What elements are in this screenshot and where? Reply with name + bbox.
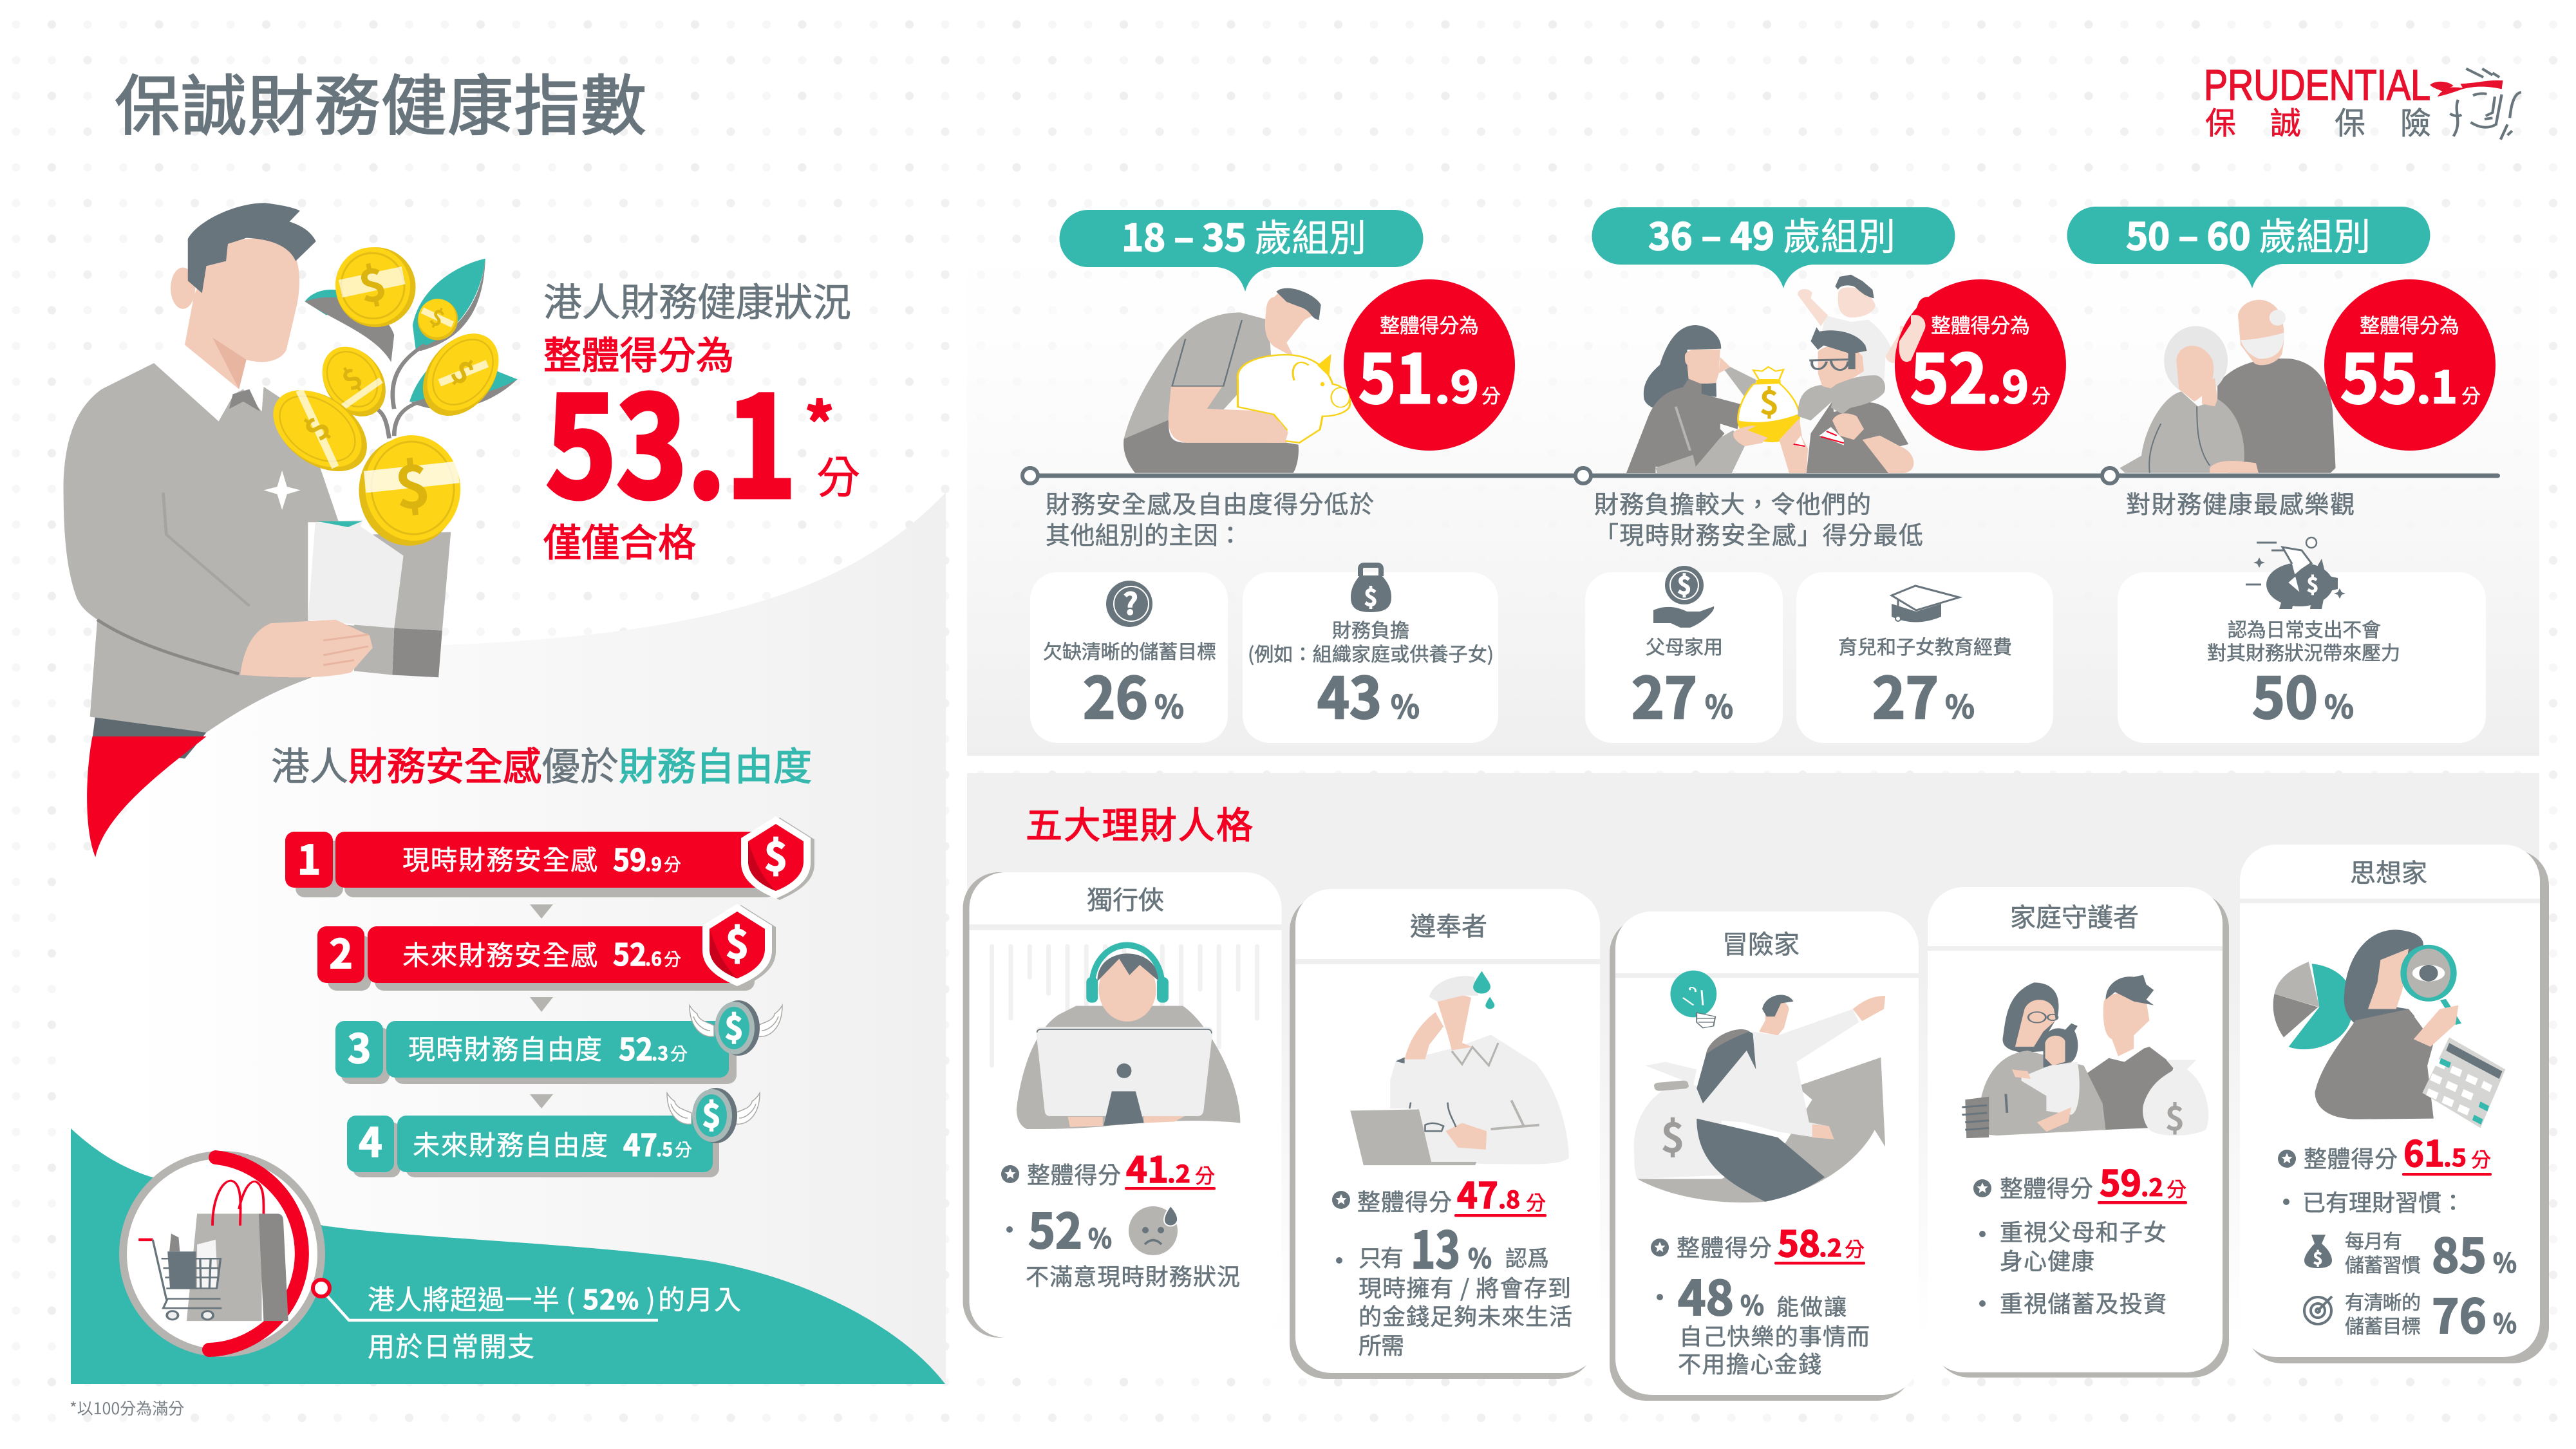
ranking bar 4: .5 bbox=[656, 1135, 673, 1162]
icon: shopping ring bbox=[123, 1155, 321, 1353]
card: adventurer 冒險家: 58 bbox=[1778, 1215, 1820, 1267]
stat card: education 27%: % bbox=[1945, 682, 1975, 728]
ranking bar 3: 52 bbox=[619, 1025, 653, 1069]
callout: 52% spent on daily expenses: 港人將超過一半 bbox=[368, 1278, 559, 1318]
icon: coin on hand bbox=[1653, 566, 1714, 628]
icon: gold coins: $ bbox=[332, 356, 370, 399]
card: thinker 思想家: % bbox=[2493, 1302, 2517, 1341]
logo: Prudential: 保 bbox=[2335, 98, 2365, 143]
icon: piggy bank rider: $ bbox=[2307, 569, 2318, 599]
arrow bbox=[530, 904, 553, 919]
text: group 1 reason: 其他組別的主因： bbox=[1046, 516, 1243, 551]
card: family guardian 家庭守護者: .2 bbox=[2141, 1168, 2163, 1203]
card: family guardian 家庭守護者: $ bbox=[2165, 1092, 2185, 1140]
text: group 2 reason bbox=[1594, 485, 1923, 551]
illustration: man holding money plant bbox=[64, 203, 518, 857]
stat card: daily expenses not stressful 50%: 50 bbox=[2252, 653, 2318, 735]
card: thinker 思想家: 儲蓄目標 bbox=[2345, 1311, 2421, 1339]
ranking bar 3: 3 bbox=[348, 1016, 371, 1074]
stat card: financial burden 43%: 43 bbox=[1317, 653, 1382, 735]
icon: graduation cap bbox=[1892, 586, 1959, 622]
card: follower 遵奉者: 遵奉者 bbox=[1410, 906, 1487, 943]
card: loner 獨行俠: 41 bbox=[1126, 1141, 1169, 1193]
card: adventurer 冒險家: 自己快樂的事情而 bbox=[1679, 1318, 1870, 1352]
star icon bbox=[1332, 1191, 1350, 1209]
stat card: education 27%: 27 bbox=[1872, 653, 1939, 735]
card: follower 遵奉者: 只有 bbox=[1359, 1240, 1404, 1273]
illustration: family bbox=[1962, 975, 2208, 1138]
text block: overall score 53.1: 僅僅合格 bbox=[543, 512, 696, 567]
illustration: family of three with money bag: $ bbox=[1760, 376, 1779, 424]
icon: worried face bbox=[1129, 1206, 1178, 1255]
card: follower 遵奉者 bbox=[1290, 889, 1600, 1379]
ranking bar 2: 未來財務安全感 bbox=[402, 934, 597, 973]
ranking bar 1: .9 bbox=[645, 850, 662, 877]
card: family guardian 家庭守護者: 重視父母和子女 bbox=[2000, 1214, 2167, 1248]
stat card: parents allowance 27%: % bbox=[1705, 682, 1733, 728]
ranking bar 2: 52 bbox=[613, 930, 646, 975]
card: follower 遵奉者: 47 bbox=[1457, 1167, 1498, 1219]
footnote: *以100分為滿分 bbox=[70, 1396, 184, 1419]
icon: winged coin bbox=[690, 1000, 782, 1056]
arrow bbox=[530, 1094, 553, 1108]
bubble: age 50-60: 50 – 60 歲組別 bbox=[2126, 207, 2371, 261]
icon: gold coins: $ bbox=[443, 347, 485, 394]
card: loner 獨行俠: 分 bbox=[1195, 1160, 1215, 1189]
illustration: young person with piggy bank bbox=[1123, 288, 1350, 473]
icon: winged coin: $ bbox=[724, 1003, 744, 1049]
icon: target bbox=[2304, 1296, 2332, 1324]
title: 保誠財務健康指數 bbox=[115, 54, 646, 149]
card: adventurer 冒險家: 能做讓 bbox=[1776, 1289, 1847, 1322]
icon: winged coin bbox=[667, 1088, 760, 1143]
ranking bar 3: 分 bbox=[670, 1040, 688, 1065]
child's hand over circle bbox=[1899, 315, 1925, 362]
stat card: education 27% bbox=[1796, 572, 2053, 743]
panel: age groups background bbox=[967, 193, 2539, 756]
icon: kettlebell bbox=[1351, 565, 1391, 613]
logo: Prudential: 險 bbox=[2400, 98, 2431, 143]
callout: 52% spent on daily expenses: 用於日常開支 bbox=[368, 1325, 534, 1365]
stat card: daily expenses not stressful 50%: % bbox=[2324, 682, 2354, 728]
ranking bar 2: .6 bbox=[645, 944, 662, 971]
score circle 52.9: .9 bbox=[1987, 352, 2029, 416]
card: thinker 思想家: .5 bbox=[2443, 1139, 2467, 1173]
card: adventurer 冒險家: 48 bbox=[1678, 1260, 1734, 1329]
ranking bar 3: .3 bbox=[652, 1039, 668, 1066]
icon: winged coin: $ bbox=[702, 1090, 721, 1137]
heading: five personalities: 五大理財人格 bbox=[1026, 796, 1253, 849]
stat card: financial burden 43%: % bbox=[1391, 682, 1420, 728]
card: loner 獨行俠: 獨行俠 bbox=[1087, 879, 1164, 917]
icon: gold coins: $ bbox=[292, 407, 340, 449]
text: group 1 reason bbox=[1046, 485, 1374, 551]
card: thinker 思想家: 76 bbox=[2432, 1279, 2487, 1347]
icon: shield bbox=[702, 904, 776, 987]
icon: gold coins: $ bbox=[426, 299, 451, 333]
star icon bbox=[2278, 1150, 2296, 1168]
icon: shield: $ bbox=[764, 825, 787, 883]
bubble: age 18-35 bbox=[1060, 208, 1423, 292]
card: family guardian 家庭守護者: 分 bbox=[2167, 1173, 2186, 1202]
card: thinker 思想家: 已有理財習慣： bbox=[2302, 1184, 2465, 1218]
bubble: age 18-35: 18 – 35 歲組別 bbox=[1122, 208, 1366, 262]
text block: overall score 53.1 bbox=[543, 272, 860, 567]
card: adventurer 冒險家 bbox=[1610, 911, 1919, 1401]
bubble: age 50-60 bbox=[2067, 207, 2430, 288]
teal wave bbox=[71, 1128, 945, 1384]
score circle 51.9 bbox=[1344, 279, 1515, 451]
card: follower 遵奉者: 分 bbox=[1526, 1187, 1546, 1216]
icon: question coin: ? bbox=[1123, 581, 1138, 624]
icon: shield bbox=[741, 816, 814, 900]
card: loner 獨行俠: 52 bbox=[1028, 1193, 1082, 1262]
text block: overall score 53.1: 53.1 bbox=[546, 337, 796, 537]
ranking bar 3: 現時財務自由度 bbox=[408, 1028, 602, 1067]
callout: 52% spent on daily expenses: 的月入 bbox=[658, 1278, 741, 1318]
card: follower 遵奉者: 整體得分 bbox=[1357, 1184, 1452, 1217]
logo: Prudential bbox=[2204, 61, 2521, 143]
stat card: no saving goal 26%: 欠缺清晰的儲蓄目標 bbox=[1043, 636, 1216, 664]
icon: gold coins: $ bbox=[352, 248, 392, 317]
star icon bbox=[1973, 1179, 1991, 1197]
stat card: daily expenses not stressful 50%: 認為日常支出不會 bbox=[2228, 614, 2381, 642]
text block: overall score 53.1: * bbox=[805, 379, 834, 462]
score circle 55.1 bbox=[2324, 279, 2496, 451]
score circle 55.1: 55 bbox=[2340, 325, 2418, 422]
card: loner 獨行俠: 整體得分 bbox=[1027, 1157, 1121, 1190]
ranking bar 1: 1 bbox=[297, 828, 321, 886]
illustration: elderly couple bbox=[2120, 300, 2336, 473]
illustration: worried man with laptop bbox=[1350, 971, 1569, 1165]
score circle 51.9: 整體得分為 bbox=[1380, 310, 1479, 339]
text block: overall score 53.1: 整體得分為 bbox=[543, 325, 734, 380]
callout: 52% spent on daily expenses bbox=[123, 1155, 741, 1365]
ranking bar 1 bbox=[285, 816, 814, 900]
stat card: parents allowance 27% bbox=[1585, 566, 1783, 743]
star icon bbox=[1651, 1239, 1669, 1257]
icon: question coin bbox=[1106, 581, 1152, 627]
ranking bar 4 bbox=[347, 1088, 760, 1177]
text: group 2 reason: 「現時財務安全感」得分最低 bbox=[1594, 516, 1923, 551]
ranking bar 4: 4 bbox=[359, 1110, 382, 1168]
timeline bbox=[1022, 468, 2500, 483]
card: follower 遵奉者: .8 bbox=[1498, 1181, 1520, 1215]
icon: money bag: $ bbox=[2313, 1246, 2323, 1269]
ranking bar 2: 分 bbox=[664, 946, 681, 971]
card: family guardian 家庭守護者 bbox=[1928, 887, 2229, 1378]
ranking bar 1: 現時財務安全感 bbox=[402, 839, 597, 878]
card: thinker 思想家 bbox=[2240, 845, 2549, 1363]
card: thinker 思想家: 61 bbox=[2403, 1125, 2445, 1177]
text: group 3 reason: 對財務健康最感樂觀 bbox=[2126, 485, 2355, 520]
score circle 51.9: 分 bbox=[1481, 380, 1501, 409]
icon: shield: $ bbox=[726, 912, 749, 970]
ranking bar 1: 59 bbox=[613, 836, 646, 880]
card: family guardian 家庭守護者: 重視儲蓄及投資 bbox=[2000, 1285, 2167, 1319]
stat card: parents allowance 27%: 父母家用 bbox=[1646, 631, 1723, 660]
score circle 55.1: 分 bbox=[2461, 380, 2481, 409]
stat card: daily expenses not stressful 50%: 對其財務狀況帶來壓力 bbox=[2207, 637, 2400, 666]
score circle 51.9: .9 bbox=[1434, 352, 1479, 416]
card: loner 獨行俠: % bbox=[1088, 1217, 1112, 1257]
illustration: woman with magnifier and calculator bbox=[2273, 930, 2505, 1128]
score circle 55.1: .1 bbox=[2416, 352, 2458, 416]
illustration: family of three with money bag bbox=[1626, 275, 1914, 473]
illustration: adventurer with arrow and money bag bbox=[1634, 971, 1885, 1202]
card: thinker 思想家: % bbox=[2493, 1242, 2517, 1281]
text: group 2 reason: 財務負擔較大，令他們的 bbox=[1594, 485, 1871, 520]
stat card: education 27%: 育兒和子女教育經費 bbox=[1838, 631, 2012, 660]
icon: kettlebell: $ bbox=[1364, 579, 1378, 613]
score circle 52.9: 整體得分為 bbox=[1931, 310, 2030, 339]
stat card: no saving goal 26% bbox=[1030, 572, 1228, 743]
card: follower 遵奉者: 13 bbox=[1411, 1211, 1460, 1283]
ranking bar 3 bbox=[335, 1000, 782, 1084]
score circle 52.9 bbox=[1895, 279, 2066, 451]
card: adventurer 冒險家: .2 bbox=[1819, 1229, 1842, 1264]
card: loner 獨行俠: 不滿意現時財務狀況 bbox=[1026, 1258, 1240, 1292]
panel: five personalities background bbox=[967, 773, 2539, 1352]
stat card: financial burden 43%: 財務負擔 bbox=[1332, 615, 1409, 643]
ranking bar 4: 分 bbox=[675, 1136, 692, 1161]
card: thinker 思想家: 有清晰的 bbox=[2345, 1287, 2421, 1315]
arrow bbox=[530, 997, 553, 1012]
star icon bbox=[1001, 1165, 1019, 1183]
logo: Prudential: PRUDENTIAL bbox=[2204, 61, 2430, 109]
logo: Prudential: 保 bbox=[2205, 98, 2236, 143]
card: adventurer 冒險家: $ bbox=[1660, 1105, 1685, 1164]
stat card: daily expenses not stressful 50% bbox=[2118, 538, 2486, 743]
ranking bar 2: 2 bbox=[329, 922, 353, 980]
card: thinker 思想家: 每月有 bbox=[2345, 1226, 2402, 1254]
text: group 1 reason: 財務安全感及自由度得分低於 bbox=[1046, 485, 1374, 520]
card: follower 遵奉者: 的金錢足夠未來生活 bbox=[1359, 1298, 1572, 1332]
ranking bar 1: 分 bbox=[664, 851, 681, 876]
card: adventurer 冒險家: 不用擔心金錢 bbox=[1678, 1346, 1821, 1379]
card: follower 遵奉者: 認爲 bbox=[1505, 1241, 1549, 1273]
card: family guardian 家庭守護者: 家庭守護者 bbox=[2010, 897, 2139, 934]
score circle 51.9: 51 bbox=[1359, 325, 1433, 422]
logo: Prudential: 誠 bbox=[2270, 98, 2301, 143]
bubble: age 36-49 bbox=[1592, 207, 1955, 288]
card: thinker 思想家: 儲蓄習慣 bbox=[2345, 1249, 2421, 1278]
card: thinker 思想家: 整體得分 bbox=[2304, 1141, 2398, 1174]
callout: 52% spent on daily expenses: ( 52% ) bbox=[566, 1278, 655, 1318]
bubble: age 36-49: 36 – 49 歲組別 bbox=[1648, 207, 1895, 261]
icon: gold coins: $ bbox=[390, 438, 434, 527]
heading: financial security vs freedom: 港人財務安全感優於財務自由度 bbox=[271, 736, 812, 792]
stat card: financial burden 43% bbox=[1243, 565, 1498, 743]
ranking bar 4: 47 bbox=[623, 1121, 657, 1165]
score circle 55.1: 整體得分為 bbox=[2360, 310, 2459, 339]
score circle 52.9: 分 bbox=[2031, 380, 2051, 409]
card: adventurer 冒險家: 分 bbox=[1845, 1233, 1865, 1262]
score circle 52.9: 52 bbox=[1910, 325, 1988, 422]
ranking bar 4: 未來財務自由度 bbox=[413, 1124, 608, 1163]
icon: piggy bank rider bbox=[2246, 538, 2346, 609]
stat card: no saving goal 26%: % bbox=[1154, 682, 1184, 728]
panel: left financial health background bbox=[71, 492, 946, 1384]
card: follower 遵奉者: % bbox=[1468, 1237, 1492, 1276]
card: adventurer 冒險家: % bbox=[1740, 1284, 1764, 1323]
card: loner 獨行俠: .2 bbox=[1167, 1155, 1190, 1190]
card: loner 獨行俠 bbox=[963, 872, 1281, 1338]
stat card: no saving goal 26%: 26 bbox=[1083, 653, 1148, 735]
card: family guardian 家庭守護者: 身心健康 bbox=[2000, 1243, 2094, 1276]
icon: gold coins bbox=[258, 239, 514, 550]
card: adventurer 冒險家: 冒險家 bbox=[1722, 924, 1800, 961]
stat card: financial burden 43%: (例如：組織家庭或供養子女) bbox=[1248, 639, 1494, 667]
text block: overall score 53.1: 分 bbox=[816, 442, 860, 506]
icon: money bag bbox=[2304, 1235, 2332, 1269]
card: thinker 思想家: 分 bbox=[2471, 1144, 2491, 1173]
card: family guardian 家庭守護者: 整體得分 bbox=[2000, 1170, 2093, 1204]
text block: overall score 53.1: 港人財務健康狀況 bbox=[543, 272, 851, 328]
card: adventurer 冒險家: 整體得分 bbox=[1677, 1229, 1772, 1263]
stat card: parents allowance 27%: 27 bbox=[1631, 653, 1697, 735]
card: follower 遵奉者: 所需 bbox=[1359, 1327, 1404, 1361]
ranking bar 2 bbox=[317, 904, 776, 991]
icon: coin on hand: $ bbox=[1677, 566, 1691, 601]
illustration: person at laptop bbox=[992, 945, 1257, 1129]
card: family guardian 家庭守護者: 59 bbox=[2100, 1155, 2141, 1206]
card: follower 遵奉者: 現時擁有 / 將會存到 bbox=[1359, 1270, 1571, 1304]
card: thinker 思想家: 思想家 bbox=[2350, 852, 2427, 890]
card: thinker 思想家: 85 bbox=[2432, 1219, 2487, 1287]
